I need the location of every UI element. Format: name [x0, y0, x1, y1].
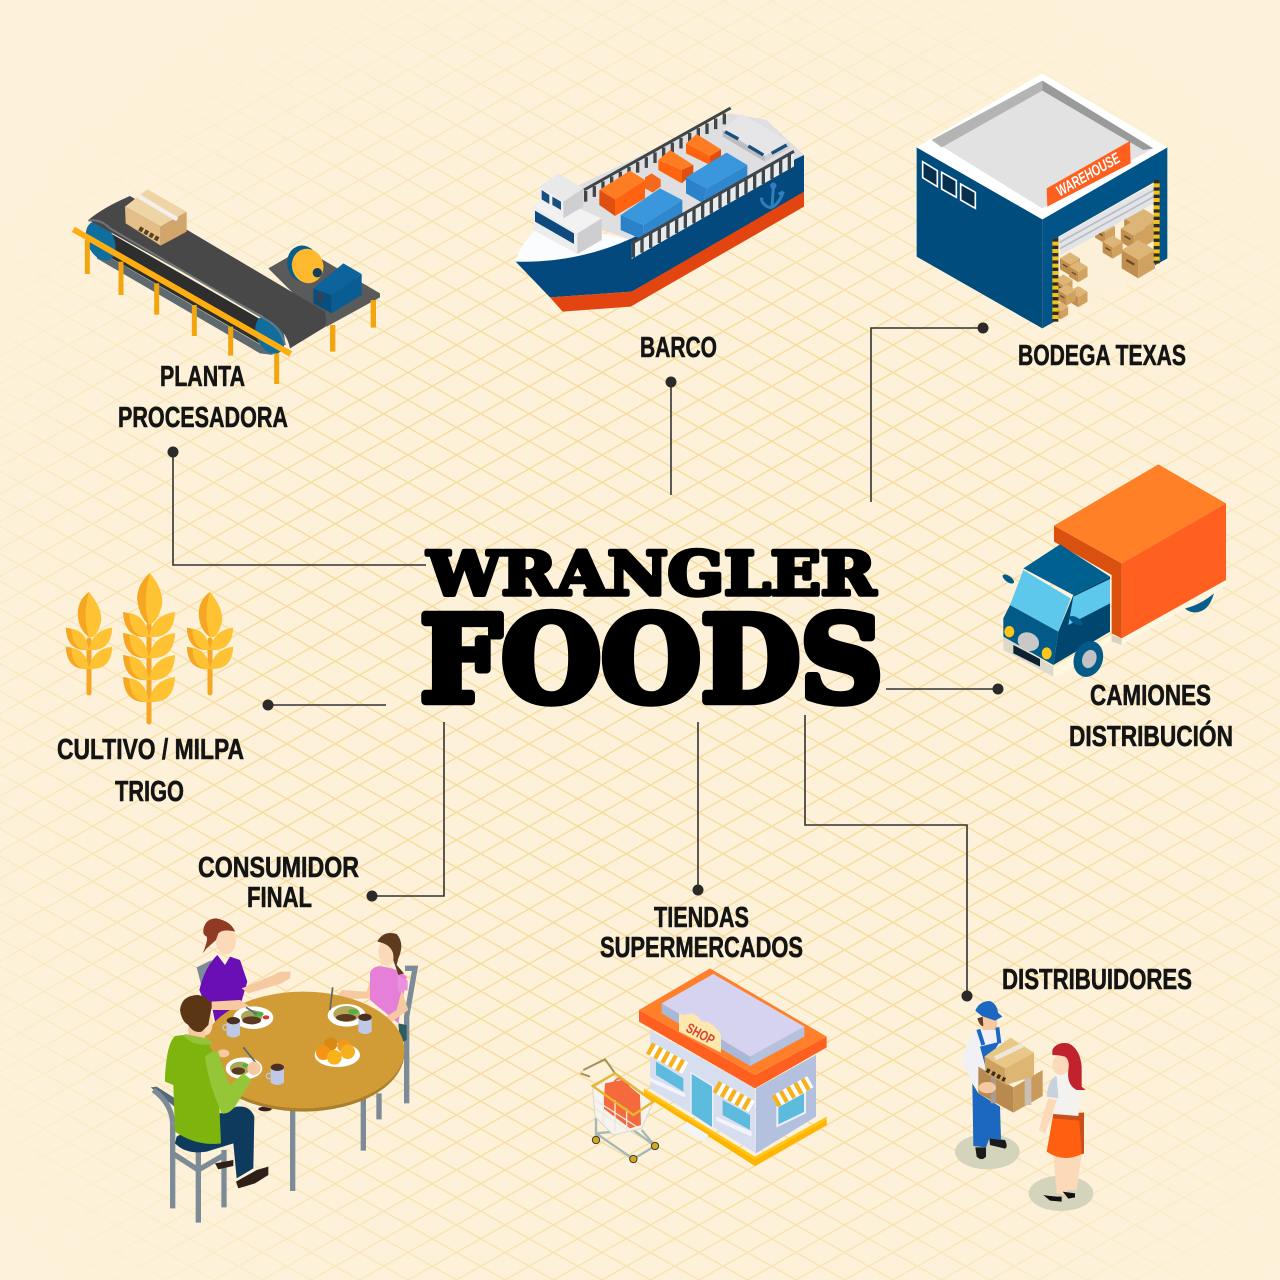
label: planta procesadora: PROCESADORA: [118, 402, 288, 434]
orange container 2: [658, 150, 693, 183]
label: cultivo milpa trigo: CULTIVO / MILPA: [57, 734, 244, 766]
shop sign: [679, 1013, 721, 1053]
title: FOODS: [420, 590, 883, 729]
boxes carried: [978, 1038, 1043, 1113]
label: cultivo milpa trigo: TRIGO: [115, 776, 184, 808]
plates of food: [226, 1004, 366, 1079]
label: consumidor final: FINAL: [247, 882, 312, 914]
shop windows: [650, 1062, 805, 1142]
connector: cultivo: [262, 700, 386, 710]
middle stalk: [123, 573, 175, 722]
windows: [923, 162, 975, 208]
girl in pink: [335, 933, 408, 1043]
icon: family at table: [151, 918, 415, 1223]
label: camiones distribución: CAMIONES: [1090, 680, 1211, 712]
right stalk: [187, 592, 233, 693]
warehouse sign: [1047, 141, 1131, 207]
label: camiones distribución: [1069, 680, 1233, 753]
label: tiendas supermercados: SUPERMERCADOS: [600, 932, 803, 964]
orange container 1: [599, 171, 661, 216]
man in green: [165, 995, 268, 1188]
connector: consumidor: [366, 722, 444, 902]
table legs: [293, 1097, 363, 1191]
customer: [1039, 1043, 1086, 1202]
label: tiendas supermercados: TIENDAS: [654, 902, 749, 934]
shop roof: [639, 968, 827, 1088]
chair: girl: [379, 968, 415, 1119]
label: consumidor final: [198, 852, 359, 914]
anchor: [761, 184, 783, 207]
stacked boxes: [1053, 208, 1159, 319]
connector: camiones: [886, 684, 1004, 694]
connector: planta: [168, 446, 426, 565]
connector: distribuidores: [805, 715, 972, 1002]
shop base: [644, 1088, 827, 1166]
icon: shop and cart: [581, 968, 827, 1166]
label: camiones distribución: DISTRIBUCIÓN: [1069, 721, 1233, 753]
icon: wheat stalks: [66, 573, 233, 722]
blue container 1: [621, 188, 682, 240]
cardboard box on belt: [125, 189, 187, 246]
delivery worker: [963, 1001, 1007, 1159]
icon: warehouse: [917, 73, 1167, 328]
title: WRANGLER: [426, 540, 877, 610]
label: cultivo milpa trigo: [57, 734, 244, 808]
connector: tiendas: [692, 722, 704, 896]
label: consumidor final: CONSUMIDOR: [198, 852, 359, 884]
warehouse sign: WAREHOUSE: [1053, 150, 1124, 200]
rear deck house: [723, 114, 789, 162]
orange container 3: [686, 134, 721, 165]
label: barco: BARCO: [640, 332, 717, 364]
icon: delivery worker and customer: [955, 1001, 1093, 1211]
shop sign: SHOP: [684, 1020, 718, 1048]
left stalk: [66, 592, 112, 693]
label: planta procesadora: PLANTA: [160, 361, 245, 393]
bridge: [533, 173, 602, 254]
icon: conveyor belt: [73, 189, 380, 384]
label: planta procesadora: [118, 361, 288, 434]
blue container 2: [686, 153, 747, 203]
chair: woman: [197, 960, 212, 993]
woman in purple: [199, 918, 291, 1022]
man's chair: [151, 1087, 224, 1223]
icon: delivery truck: [1001, 464, 1226, 681]
label: distribuidores: DISTRIBUIDORES: [1002, 964, 1192, 996]
round table: [202, 992, 404, 1112]
label: bodega texas: BODEGA TEXAS: [1018, 340, 1186, 372]
label: tiendas supermercados: [600, 902, 803, 964]
awnings: [649, 1048, 810, 1107]
connector: barco: [666, 376, 676, 495]
connector: bodega: [871, 322, 988, 502]
icon: cargo ship: [516, 108, 804, 312]
shop walls: [650, 1030, 816, 1153]
shopping cart: [581, 1059, 659, 1163]
coffee cups: [223, 1014, 372, 1085]
